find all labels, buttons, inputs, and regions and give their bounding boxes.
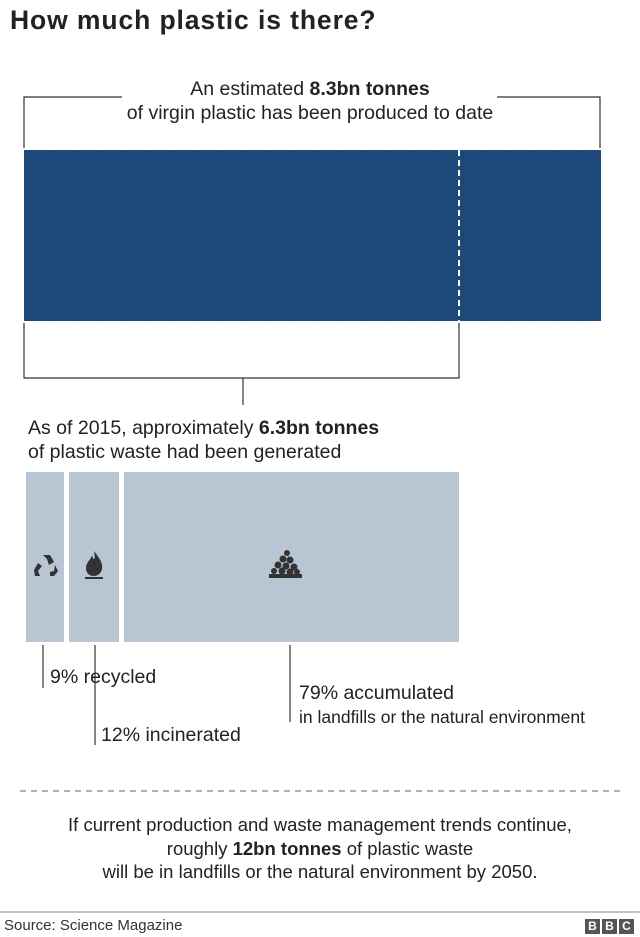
label: accumulated [299, 682, 585, 727]
logo: BBC [585, 919, 634, 934]
logo: BBC: B [605, 919, 614, 933]
text: 2050 projection [68, 814, 572, 882]
text: 6.3bn tonnes: of plastic waste had been generated [28, 441, 341, 463]
icon: landfill pile [269, 550, 302, 578]
label: accumulated: 79% accumulated [299, 682, 454, 704]
title: How much plastic is there? [10, 5, 377, 35]
logo: BBC: B [588, 919, 597, 933]
text: 6.3bn tonnes: As of 2015, approximately 6.3bn tonnes [28, 417, 379, 439]
text: 2050 projection: roughly 12bn tonnes of plastic waste [167, 838, 473, 858]
text: 2050 projection: If current production and waste management trends continue, [68, 814, 572, 835]
text: 8.3bn tonnes: of virgin plastic has been produced to date [127, 102, 493, 124]
bracket bottom [24, 323, 459, 405]
text: 8.3bn tonnes: An estimated 8.3bn tonnes [190, 78, 430, 100]
icon: flame [85, 551, 103, 579]
source: Source: Science Magazine [4, 917, 182, 934]
leader lines [43, 645, 290, 745]
text: 8.3bn tonnes [127, 78, 493, 124]
text: 6.3bn tonnes [28, 417, 379, 463]
label: incinerated: 12% incinerated [101, 724, 241, 746]
bar: 8.3bn [24, 150, 601, 321]
label: accumulated: in landfills or the natural environment [299, 707, 585, 727]
text: 2050 projection: will be in landfills or the natural environment by 2050. [102, 861, 538, 882]
icon: recycle [34, 555, 58, 576]
bracket top [24, 97, 600, 148]
label: recycled: 9% recycled [50, 666, 156, 688]
logo: BBC: C [622, 919, 631, 933]
bars: waste breakdown [26, 472, 459, 642]
